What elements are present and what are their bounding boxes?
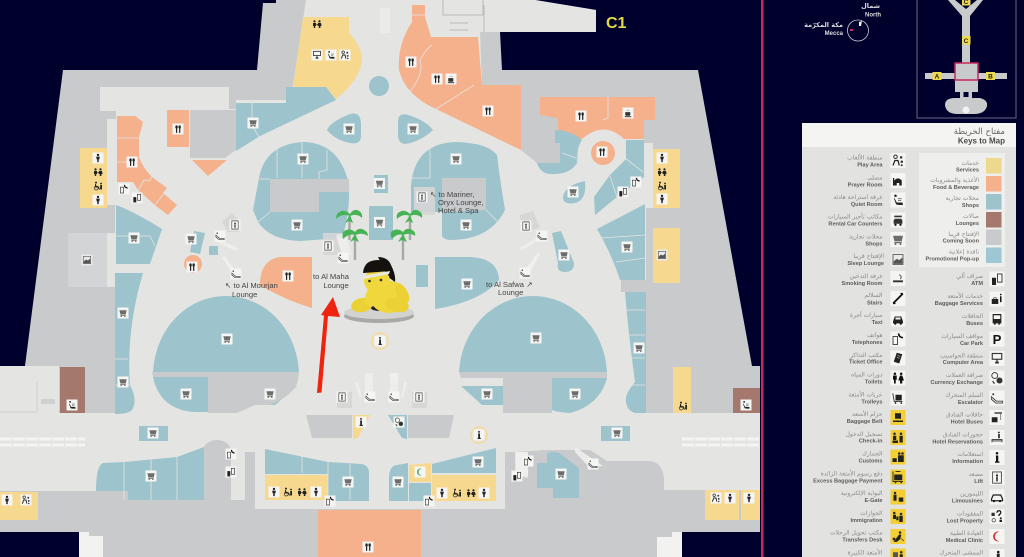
key: rental car counters: Rental Car Counters <box>828 222 882 228</box>
map pictograms <box>2 20 754 553</box>
inset current location <box>955 63 978 80</box>
legend: lounges: Lounges <box>956 221 979 227</box>
heading: Keys to Map: مفتاح الخريطة <box>954 127 1005 137</box>
service tiles north <box>312 20 350 60</box>
compass: north label: North <box>865 12 881 18</box>
compass: north label <box>861 2 881 18</box>
pink divider <box>761 0 764 557</box>
zones: shops teal <box>96 76 646 501</box>
toilets west <box>92 152 142 206</box>
key: play area: Play Area <box>857 162 883 168</box>
key: e-gate <box>841 490 906 504</box>
key: e-gate: البوابة الإلكترونية <box>841 490 883 497</box>
legend: shops <box>946 194 1002 210</box>
key: taxi: Taxi <box>872 320 883 326</box>
legend: coming soon: Coming Soon <box>943 238 980 244</box>
key: excess baggage payment <box>813 470 906 484</box>
key: ATM: صراف آلي <box>956 271 983 280</box>
inset labels: C <box>964 38 969 45</box>
compass: dial <box>848 20 868 41</box>
key: limousines: الليموزين <box>960 490 983 498</box>
key: prayer room <box>848 173 906 188</box>
west annex desk <box>41 399 55 404</box>
key: rental car counters <box>828 212 906 228</box>
info and exchange <box>356 336 484 478</box>
key: baggage belt: Baggage Belt <box>847 419 883 425</box>
key: medical clinic <box>946 529 1004 544</box>
key: escalator: Escalator <box>958 400 984 406</box>
compass: north label: شمال <box>861 2 880 10</box>
key: prayer room: Prayer Room <box>848 182 883 188</box>
inset labels: B <box>988 74 993 80</box>
legend: food and beverage <box>930 176 1002 192</box>
building outline <box>0 0 760 557</box>
key: computer area <box>940 351 1004 366</box>
label: to Al Maha Lounge <box>313 272 350 290</box>
light corridor strip <box>107 233 115 287</box>
key: baggage services <box>935 292 1004 307</box>
key: prayer room: مصلى <box>867 174 882 182</box>
key: stairs <box>864 291 906 306</box>
key: toilets <box>851 370 906 386</box>
key: escalator <box>945 390 1004 406</box>
key: play area <box>847 153 906 168</box>
heading: Keys to Map <box>954 127 1005 146</box>
key: immigration: Immigration <box>850 518 883 524</box>
legend: food and beverage: Food & Beverage <box>933 185 979 191</box>
stair landings <box>79 532 682 557</box>
key: check-in: تسجيل الدخول <box>846 431 883 438</box>
panel: keys to map <box>802 123 1016 557</box>
legend: promotional pop-up <box>926 248 1002 263</box>
white shop divisions <box>115 15 645 500</box>
palm tree group <box>336 210 422 260</box>
key: taxi: سيارات أجرة <box>850 311 882 319</box>
label: to Al Safwa Lounge: Lounge <box>498 288 523 297</box>
key: limousines <box>952 490 1004 504</box>
key: rental car counters: مكاتب تأجير السيارات <box>828 212 882 220</box>
key: toilets: دورات المياه <box>851 372 883 378</box>
label: to Al Maha Lounge: to Al Maha <box>313 272 350 281</box>
label: to Al Safwa Lounge: to Al Safwa ↗ <box>486 280 532 289</box>
zones: services yellow <box>0 17 760 520</box>
escalators and lift pads <box>214 8 603 476</box>
info ring <box>372 333 487 443</box>
key: information: Information <box>952 459 984 465</box>
moving walkway left <box>0 439 85 445</box>
key: quiet room <box>833 192 906 208</box>
grey blocks <box>190 85 560 509</box>
key: telephones: Telephones <box>852 340 882 346</box>
key: currency exchange <box>930 370 1004 386</box>
key: excess baggage payment: Excess Baggage Payment <box>813 478 883 484</box>
key: lift: Lift <box>974 479 983 485</box>
key: lift: مصعد <box>969 471 983 478</box>
legend: promotional pop-up: Promotional Pop-up <box>926 256 980 262</box>
toilets east <box>82 152 668 266</box>
west annex <box>0 366 59 413</box>
key: ticket office <box>849 350 906 366</box>
key: moving walkway: الممشى المتحرك <box>939 550 983 556</box>
key: buses <box>962 312 1004 327</box>
compass: north needle <box>859 21 862 26</box>
shop tiles <box>118 118 644 488</box>
key: ticket office: Ticket Office <box>849 360 882 366</box>
key: smoking room: غرفة التدخين <box>850 273 882 280</box>
legend: promotional pop-up: نافذة إعلانية <box>949 248 979 256</box>
key: shops: Shops <box>865 242 882 248</box>
legend: services <box>956 158 1002 174</box>
key: trolleys: عربات الأمتعة <box>848 390 882 398</box>
panel header <box>802 123 1016 147</box>
legend: services: خدمات <box>961 160 979 167</box>
inset labels <box>932 0 995 80</box>
key: oversized baggage: الأمتعة الكبيرة <box>847 548 883 556</box>
key: shops <box>849 232 906 248</box>
legend: food and beverage: الأغذية والمشروبات <box>930 176 979 184</box>
inset circle <box>962 106 970 114</box>
key: stairs: Stairs <box>867 300 882 306</box>
key: check-in: Check-in <box>859 438 883 444</box>
heading: Keys to Map: Keys to Map <box>958 136 1005 146</box>
key: medical clinic: العيادة الطبية <box>950 530 983 537</box>
south services <box>2 400 754 506</box>
key: lift <box>969 470 1004 485</box>
key: baggage services: Baggage Services <box>935 301 983 307</box>
key: e-gate: E-Gate <box>864 498 882 504</box>
key: escalator: السلم المتحرك <box>945 392 983 399</box>
compass: Mecca label: Mecca <box>825 31 844 37</box>
key: buses: الحافلات <box>962 313 983 320</box>
key: car park: Car Park <box>960 341 984 347</box>
key: sleep lounge: الإفتتاح قريبا <box>853 253 884 260</box>
compass: Mecca needle <box>850 29 853 31</box>
teddy bear statue on plinth <box>344 257 414 323</box>
label: to Al Mourjan Lounge: Lounge <box>232 290 257 299</box>
key: quiet room: Quiet Room <box>851 202 883 208</box>
key: sleep lounge: Sleep Lounge <box>847 261 884 267</box>
key: lost property <box>947 509 1004 524</box>
key: smoking room <box>841 271 906 287</box>
key: excess baggage payment: دفع رسوم الأمتعة الزائدة <box>821 470 883 478</box>
key: baggage services: خدمات الأمتعة <box>947 292 983 300</box>
central circle plaza <box>578 128 628 178</box>
compass <box>804 2 881 41</box>
key: computer area: Computer Area <box>943 360 984 366</box>
inset frame <box>917 0 1016 118</box>
key: taxi <box>850 311 906 326</box>
airport inset map <box>917 0 1016 118</box>
key: telephones <box>852 332 906 346</box>
key: information: استعلامات <box>957 451 983 458</box>
food tiles <box>126 56 634 552</box>
concourse floor <box>0 0 760 509</box>
legend: lounges <box>956 212 1002 228</box>
sleep lounge grey room <box>68 233 107 287</box>
key: check-in <box>846 430 906 445</box>
key: hotel reservations: Hotel Reservations <box>932 440 983 446</box>
legend: shops: Shops <box>962 203 979 209</box>
key: toilets: Toilets <box>865 380 882 386</box>
key: transfers desk: مكتب تحويل الرحلات <box>830 530 882 536</box>
compass: Mecca label: مكة المكرّمة <box>804 21 843 29</box>
moving walkway right <box>682 439 760 445</box>
label: to Mariner, Oryx Lounge, Hotel and Spa <box>430 190 484 215</box>
red arrow <box>317 297 340 393</box>
inset terminal shape <box>925 0 1007 114</box>
legend: coming soon: الإفتتاح قريبا <box>948 231 979 238</box>
key: play area: منطقة الألعاب <box>847 154 882 162</box>
key: trolleys <box>848 390 906 406</box>
legend: lounges: صالات <box>963 213 979 220</box>
label: to Mariner, Oryx Lounge, Hotel and Spa: Oryx Lounge, <box>438 198 484 207</box>
panel body <box>802 147 1016 557</box>
legend: services: Services <box>956 168 979 174</box>
label: C1: C1 <box>606 15 627 32</box>
grey overlays <box>152 178 646 413</box>
key: lost property: Lost Property <box>947 518 984 524</box>
key: telephones: هواتف <box>867 332 882 339</box>
lifts and escalators <box>214 192 598 470</box>
key: currency exchange: Currency Exchange <box>930 380 983 386</box>
inset notch <box>964 92 968 97</box>
key: transfers desk: Transfers Desk <box>842 538 883 544</box>
key: smoking room: Smoking Room <box>841 281 883 287</box>
key: quiet room: غرفة استراحة هادئة <box>833 194 882 201</box>
compass: Mecca label <box>804 21 844 37</box>
key: ATM: ATM <box>971 281 983 287</box>
key: lost property: المفقودات <box>957 510 983 518</box>
label: to Mariner, Oryx Lounge, Hotel and Spa: ↖ to Mariner, <box>430 190 474 199</box>
inset labels: A <box>935 74 940 80</box>
label: to Al Mourjan Lounge <box>225 281 278 299</box>
key: sleep lounge <box>847 252 906 267</box>
key: limousines: Limousines <box>952 498 983 504</box>
legend box <box>919 153 1005 267</box>
zones: food and beverage orange <box>117 5 655 557</box>
label: to Al Maha Lounge: Lounge <box>323 281 349 290</box>
key: moving walkway <box>939 549 1004 557</box>
lounges <box>60 367 760 413</box>
key: hotel buses <box>946 410 1004 426</box>
north pier details <box>443 0 484 32</box>
key: immigration: الجوازات <box>860 510 883 517</box>
key: stairs: السلالم <box>864 292 883 299</box>
key: customs: الجمارك <box>862 450 883 458</box>
key: hotel buses: حافلات الفنادق <box>946 412 983 418</box>
key: car park: مواقف السيارات <box>941 333 983 340</box>
west annex wall <box>0 382 37 412</box>
legend: coming soon <box>943 230 1002 245</box>
key: ticket office: مكتب التذاكر <box>849 352 882 359</box>
key: baggage belt: حزام الأمتعة <box>852 410 883 418</box>
key: buses: Buses <box>966 321 983 327</box>
key: hotel buses: Hotel Buses <box>951 420 983 426</box>
label: to Al Safwa Lounge <box>486 280 532 297</box>
key: oversized baggage <box>847 548 906 557</box>
key: trolleys: Trolleys <box>861 400 882 406</box>
label: to Mariner, Oryx Lounge, Hotel and Spa: Hotel & Spa <box>438 206 479 215</box>
key: hotel reservations <box>932 430 1004 446</box>
label: to Al Mourjan Lounge: ↖ to Al Mourjan <box>225 281 278 290</box>
key: baggage belt <box>847 410 906 425</box>
legend: shops: محلات تجارية <box>946 195 979 202</box>
key: information <box>952 450 1004 465</box>
key: transfers desk <box>830 529 906 544</box>
key: shops: محلات تجارية <box>849 234 882 240</box>
key: medical clinic: Medical Clinic <box>946 538 983 544</box>
key: ATM <box>956 271 1004 287</box>
key: customs <box>859 450 906 464</box>
key: computer area: منطقة الحواسيب <box>940 352 983 360</box>
key: customs: Customs <box>859 458 882 464</box>
key: hotel reservations: حجوزات الفنادق <box>943 432 983 438</box>
key: currency exchange: صرافة العملات <box>946 372 983 379</box>
key: car park <box>941 332 1004 347</box>
key: immigration <box>850 509 906 524</box>
